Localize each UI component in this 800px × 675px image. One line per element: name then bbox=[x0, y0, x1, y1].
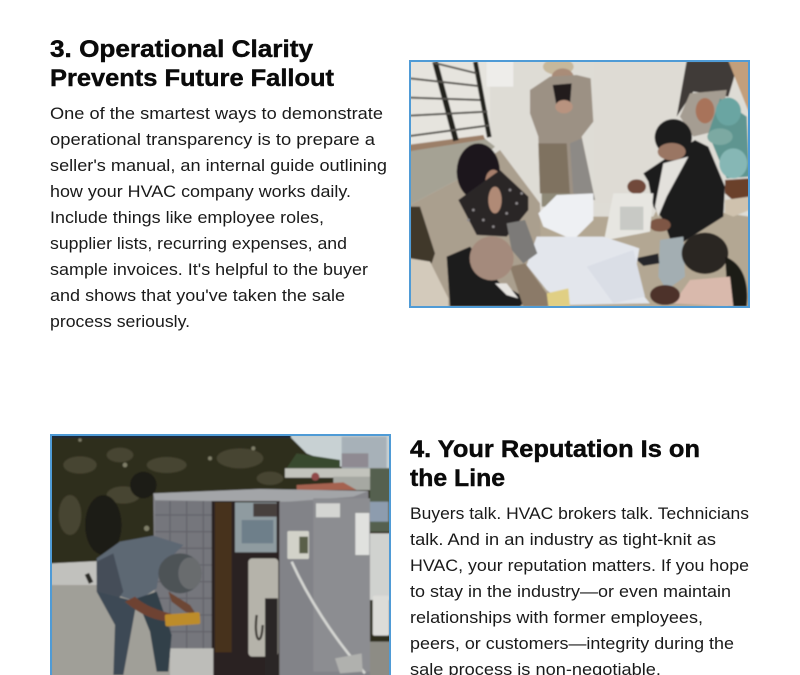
body text: section 4: peers, or customers—integrity during the bbox=[410, 635, 734, 653]
body text: section 3: how your HVAC company works daily. bbox=[50, 183, 351, 201]
body text: section 3: seller's manual, an internal guide outlining bbox=[50, 157, 387, 175]
heading: section 3: 3. Operational Clarity bbox=[50, 36, 313, 63]
heading: section 4: the Line bbox=[410, 465, 505, 492]
body text: section 4: Buyers talk. HVAC brokers talk. Technicians bbox=[410, 505, 749, 523]
photo: technician servicing a rooftop HVAC unit bbox=[47, 432, 393, 675]
heading: section 4: 4. Your Reputation Is on bbox=[410, 436, 700, 463]
technician bbox=[97, 536, 183, 602]
section 4: text column bbox=[410, 436, 749, 675]
body text: section 3: process seriously. bbox=[50, 313, 190, 331]
seated people, lower left bbox=[410, 207, 435, 263]
body text: section 4: talk. And in an industry as tight-knit as bbox=[410, 531, 716, 549]
seated woman with braids bbox=[682, 233, 728, 274]
body text: section 3: supplier lists, recurring expenses, and bbox=[50, 235, 347, 253]
sky and buildings bbox=[288, 435, 390, 468]
photo border bbox=[410, 61, 749, 307]
plans on the floor bbox=[604, 193, 653, 241]
woman in grey coat bbox=[542, 62, 574, 75]
seated woman with polka dots bbox=[457, 143, 500, 200]
section 3: text column bbox=[50, 36, 387, 331]
body text: section 3: and shows that you've taken the sale bbox=[50, 287, 345, 305]
body text: section 4: to stay in the industry—or even maintain bbox=[410, 583, 731, 601]
body text: section 3: operational transparency is to prepare a bbox=[50, 131, 376, 149]
photo: team reviewing plans seen from above bbox=[407, 57, 753, 310]
photo border bbox=[51, 435, 390, 675]
body text: section 3: One of the smartest ways to demonstrate bbox=[50, 105, 383, 123]
HVAC unit bbox=[152, 488, 370, 536]
body text: section 3: sample invoices. It's helpful to the buyer bbox=[50, 261, 369, 279]
body text: section 3 bbox=[50, 105, 387, 331]
body text: section 4 bbox=[410, 505, 749, 675]
body text: section 4: relationships with former employees, bbox=[410, 609, 703, 627]
shelf and plant bbox=[677, 61, 738, 117]
parapet and roof bbox=[52, 560, 98, 586]
standing man bbox=[643, 140, 725, 248]
heading: section 4 bbox=[410, 436, 700, 492]
heading: section 3 bbox=[50, 36, 334, 92]
body text: section 3: Include things like employee roles, bbox=[50, 209, 324, 227]
railing bbox=[410, 62, 489, 141]
tree highlights bbox=[59, 448, 283, 535]
heading: section 3: Prevents Future Fallout bbox=[50, 65, 334, 92]
body text: section 4: HVAC, your reputation matters. If you hope bbox=[410, 557, 749, 575]
